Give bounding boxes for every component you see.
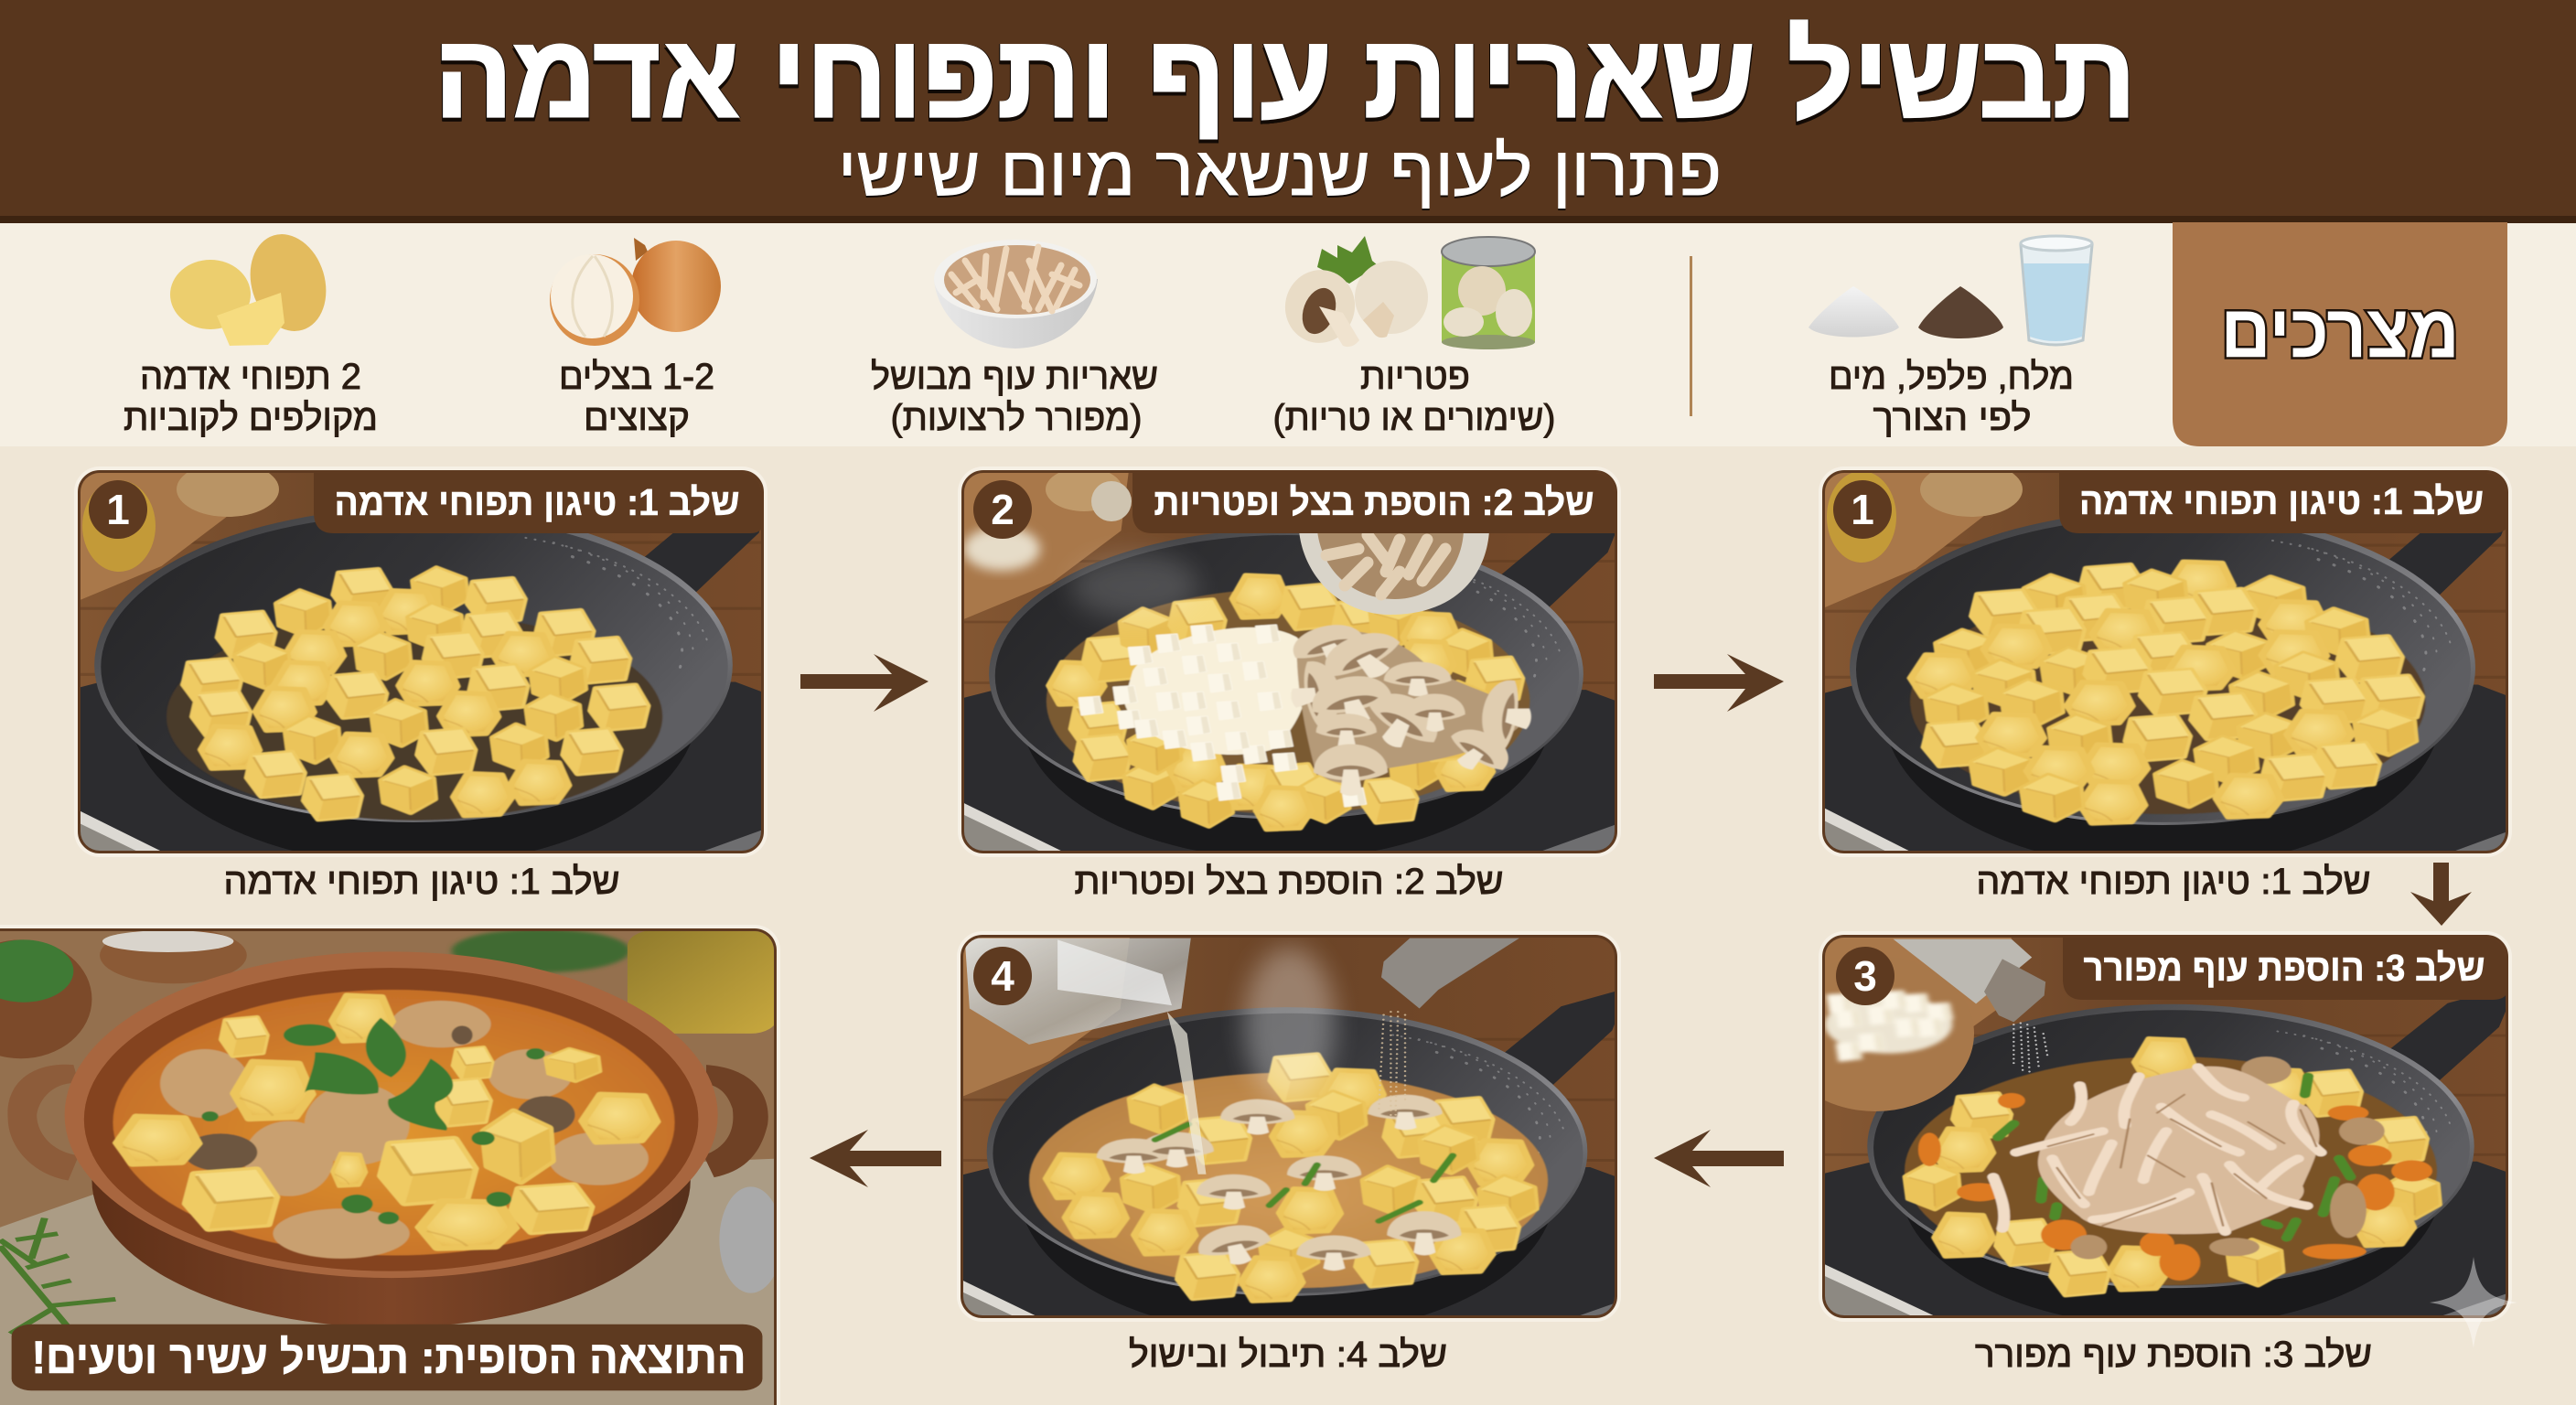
- fried potato cubes: [166, 568, 662, 820]
- ribbon: step 2: שלב 2: הוספת בצל ופטריות: [1154, 481, 1594, 523]
- potatoes, onion and mushrooms in pan: [1046, 575, 1537, 830]
- bowl of sliced mushrooms: [1299, 531, 1489, 615]
- label: onions: 1-2 בצלים: [559, 357, 714, 397]
- label: shredded to strips: (מפורר לרצועות): [891, 398, 1142, 438]
- caption: step 1 left: שלב 1: טיגון תפוחי אדמה: [224, 862, 620, 902]
- side bowls: [0, 928, 247, 1058]
- parsley garnish: [284, 1018, 453, 1131]
- icon: mushrooms: [1279, 261, 1428, 349]
- label: salt pepper water: מלח, פלפל, מים: [1829, 357, 2074, 397]
- oil jar and potato: [82, 462, 279, 572]
- icon: pepper: [1918, 286, 2003, 338]
- subtitle: פתרון לעוף שנשאר מיום שישי: [838, 133, 1722, 210]
- header band: [0, 0, 2576, 223]
- ingredient: onions: [550, 238, 721, 438]
- ribbon: step 2: [1132, 470, 1617, 533]
- caption: step 3: שלב 3: הוספת עוף מפורר: [1975, 1335, 2372, 1375]
- icon: whole potato: [239, 225, 338, 340]
- stew with mushrooms in pan: [1029, 1055, 1548, 1301]
- title: תבשיל שאריות עוף ותפוחי אדמה: [435, 11, 2136, 142]
- badge: number 1: 1: [106, 486, 130, 533]
- ingredient: potatoes: [123, 225, 378, 438]
- ingredient: mushrooms: [1273, 236, 1555, 438]
- ribbon: step 3: [2063, 935, 2508, 1000]
- final result text: התוצאה הסופית: תבשיל עשיר וטעים!: [31, 1332, 746, 1383]
- arrow: step 2 to next: [1654, 654, 1784, 712]
- icon: halved onion: [550, 254, 639, 346]
- clay pot: [7, 951, 768, 1327]
- label: peeled and cubed: מקולפים לקוביות: [123, 398, 378, 438]
- ribbon: step 1: [314, 470, 764, 533]
- ribbon: step 1: [2059, 470, 2508, 533]
- rosemary sprig: [0, 1218, 115, 1334]
- steam: [1244, 947, 1336, 1102]
- arrow: step 4 to result: [810, 1130, 941, 1187]
- ribbon: step 1: שלב 1: טיגון תפוחי אדמה: [2079, 480, 2484, 522]
- pepper shaker: [1379, 938, 1519, 1118]
- label: chopped: קצוצים: [584, 398, 690, 438]
- stew: [113, 990, 675, 1259]
- label: mushrooms: פטריות: [1360, 357, 1470, 397]
- ingredients band: [0, 222, 2576, 446]
- panel: step 4: [961, 935, 1617, 1318]
- caption: step 2: שלב 2: הוספת בצל ופטריות: [1074, 862, 1504, 902]
- tablecloth: [0, 1159, 776, 1405]
- icon: whole onion: [631, 238, 721, 332]
- steam: [1070, 552, 1198, 618]
- chicken and vegetables in pan: [1905, 1039, 2439, 1295]
- label: two potatoes: 2 תפוחי אדמה: [140, 357, 361, 397]
- ingredient: leftover chicken: [871, 240, 1158, 438]
- label: canned or fresh: (שימורים או טריות): [1273, 398, 1555, 438]
- arrow: step 1 to step 2: [800, 654, 928, 712]
- panel: step 3: [1822, 935, 2508, 1318]
- ingredient: salt, pepper, water: [1809, 236, 2092, 438]
- icon: bowl of shredded chicken: [934, 240, 1098, 349]
- caption: step 1 right: שלב 1: טיגון תפוחי אדמה: [1976, 862, 2371, 902]
- icon: sparkle watermark: [2430, 1257, 2516, 1346]
- badge: number 2: 2: [991, 486, 1014, 533]
- label: as needed: לפי הצורך: [1873, 398, 2031, 438]
- panel: step 2: [961, 470, 1617, 853]
- badge: number 4: 4: [991, 952, 1014, 1000]
- badge: number 3: [1836, 947, 1894, 1005]
- spoon: [719, 1186, 782, 1293]
- oil jar and potato: [1827, 462, 2023, 563]
- caption: step 4: שלב 4: תיבול ובישול: [1129, 1335, 1447, 1375]
- icon: salt: [1809, 286, 1899, 337]
- arrow: step 3 to step 4: [1654, 1130, 1784, 1187]
- onion pieces on board: [963, 467, 1132, 571]
- badge: number 4: [973, 947, 1032, 1005]
- panel: step 1 left: [78, 470, 764, 853]
- icon: can of mushrooms: [1442, 237, 1535, 349]
- arrow: down: [2410, 863, 2472, 926]
- badge: number 1: 1: [1851, 486, 1874, 533]
- pill: final result label: [12, 1325, 762, 1390]
- badge: number 1: [89, 480, 147, 539]
- ingredients tab: [2173, 222, 2507, 446]
- ingredients heading: מצרכים: [2221, 290, 2459, 373]
- icon: halved potato: [170, 260, 251, 329]
- icon: parsley: [1317, 236, 1378, 284]
- salt shaker: [1894, 939, 2048, 1077]
- icon: water glass: [2021, 236, 2092, 345]
- badge: number 1: [1833, 480, 1892, 539]
- pitcher pouring water: [965, 938, 1206, 1174]
- icon: potato cube: [217, 293, 284, 346]
- ribbon: step 3: שלב 3: הוספת עוף מפורר: [2084, 947, 2485, 989]
- ribbon: step 1: שלב 1: טיגון תפוחי אדמה: [335, 481, 739, 523]
- panel: final result: [0, 928, 777, 1405]
- badge: number 3: 3: [1853, 952, 1877, 1000]
- label: leftover cooked chicken: שאריות עוף מבושל: [871, 357, 1158, 397]
- badge: number 2: [973, 480, 1032, 539]
- board with chopped onion: [1776, 956, 1974, 1111]
- fried potato cubes: [1910, 562, 2425, 823]
- panel: step 1 right: [1822, 470, 2508, 853]
- herbs and oil jar: [452, 928, 778, 1034]
